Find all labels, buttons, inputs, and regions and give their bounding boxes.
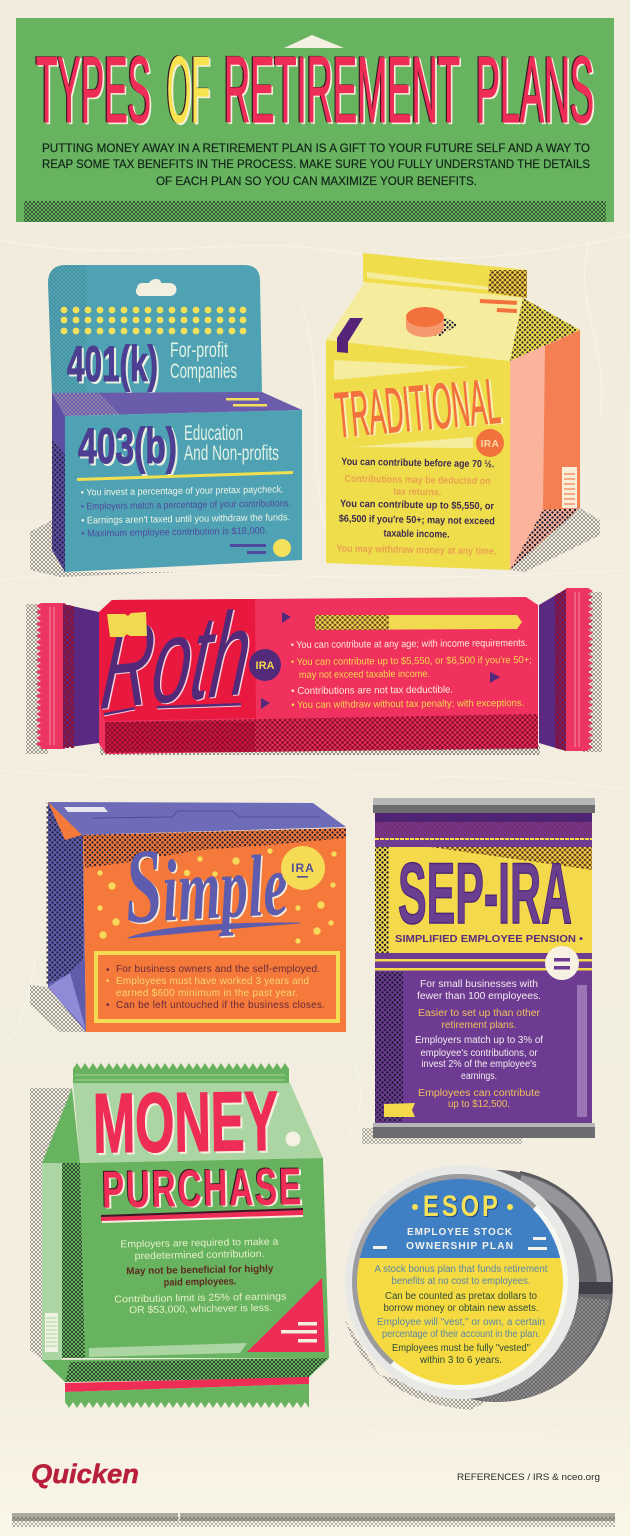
details: • (106, 1000, 110, 1011)
script underlines (104, 703, 241, 716)
details: Employers are required to make a (120, 1237, 279, 1250)
details: fewer than 100 employees. (417, 991, 541, 1002)
barcode (562, 467, 577, 508)
details: Can be left untouched if the business closes. (116, 1000, 325, 1011)
details: invest 2% of the employee's (422, 1059, 536, 1070)
intro text: REAP SOME TAX BENEFITS IN THE PROCESS. MAKE SURE YOU FULLY UNDERSTAND THE DETAILS (42, 159, 590, 171)
403(b) heading: 403(b) (78, 418, 177, 474)
roof (326, 282, 523, 361)
tin shadow (345, 1320, 490, 1410)
script swash (128, 923, 300, 938)
details box (96, 953, 338, 1021)
Roth script (96, 586, 259, 736)
details: • (106, 976, 110, 987)
can shadow (362, 1128, 522, 1144)
panel: ESOP tin (345, 1165, 613, 1410)
yellow dashes (226, 398, 259, 400)
details (291, 638, 532, 711)
details: You can contribute up to $5,550, or (340, 499, 494, 512)
box shadow (30, 520, 180, 577)
details: within 3 to 6 years. (419, 1355, 502, 1366)
details (81, 484, 291, 540)
details: percentage of their account in the plan. (382, 1329, 540, 1340)
white dashes (373, 1237, 547, 1250)
details: Easier to set up than other (418, 1008, 541, 1019)
right wrapper end (566, 588, 588, 751)
purchase heading: PURCHASE (104, 1159, 306, 1221)
side (48, 802, 86, 1032)
title: TYPES (35, 36, 150, 141)
header halftone band (24, 201, 606, 222)
roof (73, 1083, 323, 1163)
details: taxable income. (383, 528, 450, 541)
front panel (326, 340, 510, 570)
IRA badge (281, 846, 325, 890)
details: Employees can contribute (418, 1088, 540, 1099)
side halftone (52, 440, 65, 572)
details: OR $53,000, whichever is less. (129, 1303, 272, 1316)
details: may not exceed taxable income. (299, 669, 430, 681)
IRA badge: IRA (256, 660, 275, 672)
header banner (16, 18, 614, 222)
back card (48, 265, 262, 395)
barcode (45, 1313, 58, 1352)
panel: Simple IRA box (30, 802, 346, 1032)
for-profit label (170, 339, 237, 383)
light band (89, 1343, 247, 1357)
details: paid employees. (163, 1276, 237, 1289)
yellow tag (107, 612, 147, 637)
ESOP subtitle: EMPLOYEE STOCK (407, 1226, 513, 1238)
front panel (65, 410, 302, 572)
ESOP title: ESOP (423, 1190, 501, 1223)
left wrapper end (41, 603, 65, 749)
can body (375, 812, 592, 1123)
yellow circle (273, 539, 291, 557)
yellow label bar (315, 615, 522, 630)
details: tax returns. (393, 487, 442, 498)
title: TYPES (38, 39, 153, 144)
main bar (99, 597, 538, 754)
details: • You can withdraw without tax penalty; with exceptions. (291, 698, 524, 711)
panel: Roth IRA candy bar (26, 586, 602, 755)
red stripe (65, 1377, 309, 1392)
top lid (373, 798, 595, 805)
ESOP subtitle (406, 1226, 514, 1252)
bottom halftone (105, 722, 255, 752)
bottom seal (65, 1384, 309, 1402)
lid ring (345, 1165, 579, 1399)
details (113, 1237, 287, 1316)
panel: SEP-IRA can (362, 798, 595, 1144)
subheading: SIMPLIFIED EMPLOYEE PENSION • (395, 933, 583, 945)
details: You may withdraw money at any time. (336, 544, 497, 557)
side strip (577, 985, 587, 1117)
details: For business owners and the self-employed. (116, 964, 320, 975)
money heading: MONEY (94, 1076, 281, 1172)
details: You can contribute before age 70 ½. (341, 457, 495, 470)
left side (42, 1163, 62, 1360)
details: • Earnings aren't taxed until you withdraw the funds. (81, 512, 290, 527)
purchase heading (101, 1157, 306, 1221)
cap (406, 307, 458, 337)
arrows (261, 612, 500, 709)
details: Employers match up to 3% of (415, 1035, 543, 1046)
intro text: PUTTING MONEY AWAY IN A RETIREMENT PLAN IS A GIFT TO YOUR FUTURE SELF AND A WAY TO (42, 143, 590, 155)
details: • (106, 965, 110, 976)
details: A stock bonus plan that funds retirement (374, 1264, 548, 1275)
intro text: OF EACH PLAN SO YOU CAN MAXIMIZE YOUR BENEFITS. (156, 176, 477, 188)
panel: 401(k) and 403(b) box (30, 265, 302, 577)
bottom lid (373, 1123, 595, 1127)
dot (286, 1132, 300, 1146)
box shadow (30, 985, 86, 1032)
details: borrow money or obtain new assets. (384, 1303, 538, 1314)
purchase heading: PURCHASE (102, 1158, 304, 1220)
details: retirement plans. (442, 1020, 516, 1031)
ESOP title: ESOP (424, 1191, 502, 1224)
purple tab (337, 318, 363, 353)
wrapper shadows (26, 604, 48, 754)
hang hole (136, 279, 176, 296)
Simple script: Simple (124, 821, 292, 947)
title: OF (169, 39, 212, 144)
title: TYPES (36, 37, 151, 142)
details: Employees must have worked 3 years and (116, 976, 309, 987)
logo: Quicken: Quicken (31, 1459, 139, 1489)
money heading: MONEY (92, 1074, 279, 1170)
underline (101, 1208, 303, 1223)
lid and side (52, 392, 302, 416)
details (336, 457, 498, 557)
IRA badge (249, 649, 281, 681)
details (106, 964, 325, 1011)
for-profit label: Companies (170, 360, 237, 383)
details: up to $12,500. (448, 1099, 510, 1110)
details: For small businesses with (420, 979, 538, 990)
details: • You can contribute at any age; with income requirements. (291, 638, 528, 651)
401(k) heading: 401(k) (69, 338, 160, 394)
details: employee's contributions, or (420, 1048, 538, 1059)
title: OF (167, 37, 210, 142)
front (83, 828, 346, 1032)
details: $6,500 if you're 50+; may not exceed (339, 514, 495, 527)
Simple script (122, 820, 292, 947)
panel: money purchase package (30, 1063, 329, 1408)
side panel (510, 330, 580, 570)
ESOP subtitle: OWNERSHIP PLAN (406, 1240, 514, 1252)
yellow tag (384, 1103, 415, 1117)
title: OF (166, 36, 209, 141)
money heading (92, 1074, 281, 1172)
details: May not be beneficial for highly (126, 1264, 274, 1277)
top seal (363, 253, 527, 298)
403(b) heading: 403(b) (80, 420, 179, 476)
rule (77, 471, 293, 481)
references: REFERENCES / IRS & nceo.org (457, 1472, 600, 1483)
tin side (381, 1170, 613, 1402)
lid face (357, 1179, 563, 1385)
hang tab (284, 35, 344, 48)
light stripes (334, 360, 470, 380)
401(k) heading (67, 336, 160, 394)
equals badge (545, 946, 579, 980)
details: Contributions may be deducted on (344, 474, 491, 487)
for-profit label: For-profit (170, 339, 228, 362)
carton shadow (510, 508, 600, 572)
IRA badge: IRA (291, 861, 315, 875)
traditional heading (332, 365, 505, 452)
yellow dots (61, 307, 246, 334)
details: Can be counted as pretax dollars to (385, 1291, 537, 1302)
details: Employee will "vest," or own, a certain (377, 1317, 545, 1328)
footer halftone bar (12, 1513, 615, 1527)
details: earnings. (461, 1071, 497, 1082)
top seal (73, 1069, 289, 1085)
confetti dots (97, 848, 337, 944)
IRA badge: IRA (481, 439, 499, 450)
IRA badge (476, 429, 504, 457)
details: Employees must be fully "vested" (392, 1343, 530, 1354)
details: earned $600 minimum in the past year. (116, 988, 298, 999)
education label: Education (184, 422, 243, 445)
bottom gusset (42, 1358, 329, 1382)
package shadow (30, 1088, 72, 1360)
Roth script: Roth (96, 586, 257, 735)
details: • Maximum employee contribution is $18,000. (81, 526, 267, 540)
details: • You invest a percentage of your pretax paycheck. (81, 484, 284, 499)
top flap (48, 802, 346, 835)
purchase heading: PURCHASE (101, 1157, 303, 1219)
education label: And Non-profits (184, 442, 279, 465)
details: predetermined contribution. (134, 1249, 265, 1262)
front (80, 1158, 329, 1358)
details: • Contributions are not tax deductible. (291, 685, 453, 697)
details (374, 1264, 548, 1366)
red corner (247, 1278, 325, 1352)
intro text (42, 143, 590, 188)
details: • Employers match a percentage of your contributions. (81, 498, 291, 513)
details: • You can contribute up to $5,550, or $6,500 if you're 50+; (291, 655, 532, 668)
401(k) heading: 401(k) (67, 336, 158, 392)
Roth script: Roth (97, 587, 259, 736)
bars on roof (480, 299, 517, 305)
title (35, 36, 596, 144)
details: benefits at no cost to employees. (392, 1276, 530, 1287)
mini bars (230, 544, 266, 547)
Simple script: Simple (122, 820, 290, 945)
details (415, 979, 543, 1110)
education label (184, 422, 279, 465)
details: Contribution limit is 25% of earnings (114, 1291, 286, 1305)
403(b) heading (78, 418, 179, 476)
panel: traditional IRA carton (326, 253, 600, 572)
